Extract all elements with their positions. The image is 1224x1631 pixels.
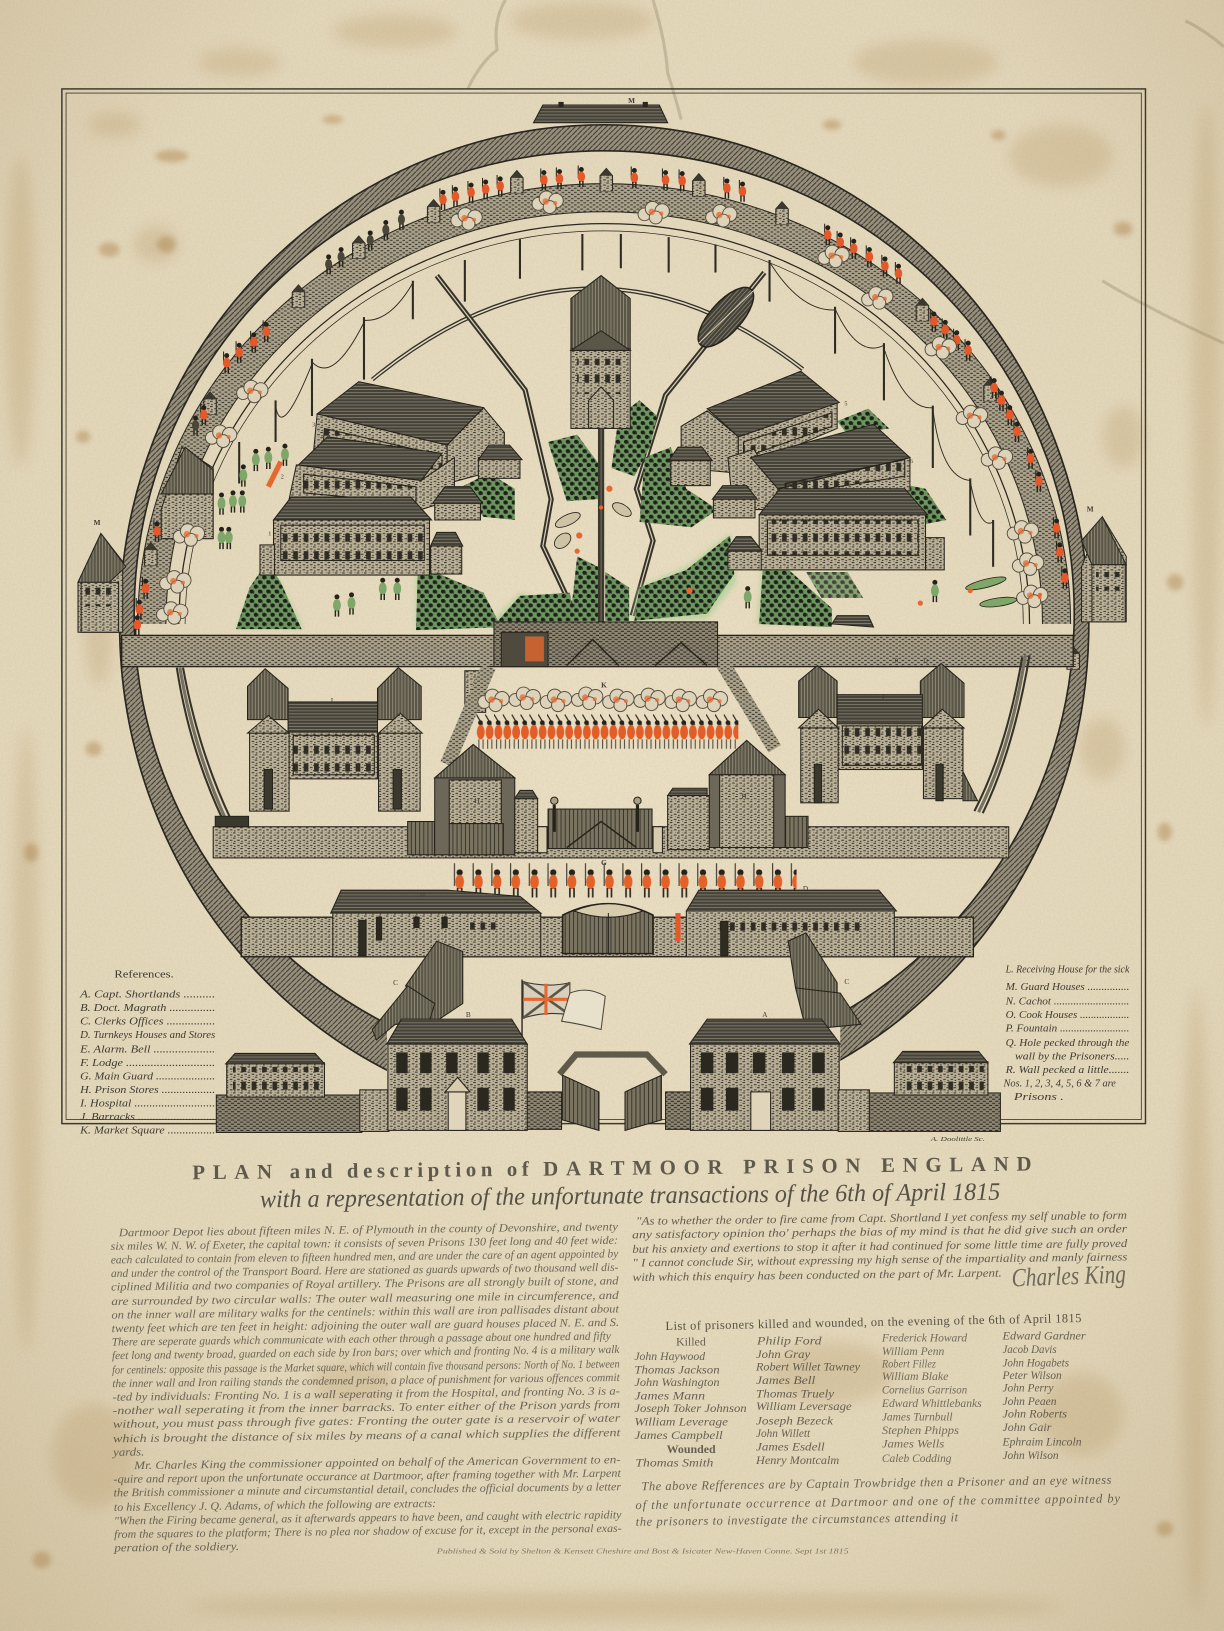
prisoners list column four: John Peaen — [1002, 1394, 1057, 1408]
store H right — [709, 740, 785, 848]
description text left column: -ted by individuals: Fronting No. 1 is a wall seperating it from the Hospital, and fronting No. 3 is a- — [112, 1386, 620, 1404]
double border frame — [62, 89, 1145, 1124]
prisoners list column three: James Turnbull — [882, 1410, 953, 1424]
main title: PLAN and description of DARTMOOR PRISON ENGLAND — [192, 1152, 1035, 1184]
prison 1 — [260, 497, 432, 575]
middle east-west wall with gate: R — [894, 657, 899, 664]
description text left column: are surrounded by two circular walls: The outer wall measuring one mile in circumference, and — [111, 1290, 619, 1308]
small house right — [893, 1051, 988, 1095]
prisoners list column four: Ephraim Lincoln — [1002, 1434, 1082, 1448]
references legend right: N. Cachot ........................... — [1005, 996, 1129, 1008]
description text left column: yards. — [112, 1446, 144, 1459]
prisoners list column four: John Hogabets — [1002, 1355, 1069, 1369]
references legend left: B. Doct. Magrath ............... — [80, 1002, 215, 1014]
description text left column: Mr. Charles King the commissioner appointed on behalf of the American Government to en- — [133, 1454, 621, 1472]
turnkeys houses wall D and outer gate — [241, 885, 973, 957]
closing note on references: the prisoners to investigate the circumstances attending it — [636, 1510, 959, 1529]
description text left column: peration of the soldiery. — [113, 1541, 239, 1555]
main guard soldiers G: G — [601, 859, 607, 867]
description text left column: to his Excellency J. Q. Adams, of which the following are extracts: — [114, 1498, 436, 1514]
references legend right: O. Cook Houses .................. — [1006, 1009, 1129, 1021]
prisons 5 6 7 right: 6 — [910, 458, 913, 465]
description text left column: -quire and report upon the unfortunate occurance at Dartmoor, after framing together with Mr. Larpent — [113, 1468, 622, 1486]
prisoners list column four: John Wilson — [1002, 1448, 1059, 1462]
description text left column: the inner wall and Iron railing stands the condemned prison, a place of punishment for various offences commit — [112, 1372, 621, 1390]
hospital I — [248, 668, 422, 811]
description text right column — [632, 1210, 1128, 1284]
iron palisade posts and chains — [239, 234, 993, 567]
prisons 1 2 3 left: 1 — [268, 531, 271, 538]
description text right column: " I cannot conclude Sir, without expressing my high sense of the impartiality and manly fairness — [632, 1251, 1128, 1269]
outer circular wall — [120, 125, 1089, 1123]
prisoners list column one: James Campbell — [634, 1428, 723, 1442]
prisoners list column three: Caleb Codding — [882, 1451, 952, 1465]
prisoners list column four: John Roberts — [1002, 1406, 1067, 1420]
prisons 1 2 3 left — [260, 382, 522, 575]
clerks offices C left — [372, 941, 463, 1040]
references legend left: K. Market Square ................ — [79, 1125, 215, 1137]
clerks offices C left: C — [393, 979, 398, 987]
radiating yard walls — [437, 272, 764, 619]
description text left column — [109, 1221, 623, 1555]
prisoners list column four — [1001, 1328, 1086, 1462]
prisoners list column one: Thomas Jackson — [634, 1363, 720, 1377]
inner curved side walls and diagonal walls — [177, 655, 1030, 822]
store H left: H — [474, 797, 480, 805]
flag — [522, 980, 605, 1040]
references legend right: wall by the Prisoners..... — [1015, 1051, 1129, 1063]
prisoners list column two: Joseph Bezeck — [756, 1414, 834, 1428]
prisoners list column one: John Washington — [634, 1375, 720, 1389]
prisoners list column three — [881, 1330, 982, 1465]
prisoners list column two: John Willett — [756, 1426, 811, 1440]
description text left column: for centinels: opposite this passage is the Market square, which will contain five thousand persons: North of No. 1 between — [112, 1358, 620, 1377]
signature Charles King: Charles King — [1011, 1259, 1126, 1292]
references legend left: F. Lodge ............................. — [79, 1057, 215, 1069]
cachot oval N — [689, 279, 763, 355]
prisoners list column three: Frederick Howard — [881, 1330, 967, 1344]
prisoners list column two: John Gray — [756, 1347, 811, 1361]
description text left column: which is brought the distance of six miles by means of a canal which supplies the different — [113, 1427, 622, 1445]
references legend left: D. Turnkeys Houses and Stores — [79, 1029, 215, 1041]
publisher imprint: Published & Sold by Shelton & Kensett Cheshire and Bost & Isicater New-Haven Conne. Sept 1st 1815 — [435, 1547, 849, 1556]
house B Doct Magrath: B — [466, 1011, 471, 1019]
main title — [192, 1152, 1035, 1213]
references legend left: I. Hospital ........................... — [79, 1097, 215, 1109]
guard house M right: M — [1087, 506, 1094, 514]
description text left column: twenty feet which are ten feet in height: adjoining the outer wall are guard houses placed N. E. and S. — [112, 1317, 619, 1335]
references legend left — [79, 969, 215, 1137]
references legend right: Prisons . — [1013, 1091, 1064, 1103]
references legend right: M. Guard Houses ............... — [1005, 981, 1129, 993]
main guard soldiers G — [451, 859, 797, 898]
barracks J: J — [882, 693, 885, 701]
clerks offices C right — [788, 933, 861, 1030]
references legend right: Q. Hole pecked through the — [1006, 1037, 1130, 1049]
list of prisoners heading: List of prisoners killed and wounded, on the evening of the 6th of April 1815 — [665, 1311, 1082, 1333]
store H right: H — [741, 793, 747, 801]
description text left column: -nother wall seperating it from the inner barracks. To enter either of the Prison yards from — [113, 1399, 620, 1417]
prisoners list column four: Peter Wilson — [1002, 1368, 1062, 1382]
hospital I: I — [331, 697, 334, 705]
prisoners list column four: Jacob Davis — [1002, 1342, 1057, 1356]
closing note on references — [635, 1473, 1121, 1529]
prison 7 — [759, 489, 944, 570]
prison 2 — [289, 437, 454, 510]
prisoners list column one: Killed — [676, 1335, 706, 1349]
engraver credit: A. Doolittle Sc. — [929, 1136, 985, 1143]
market square K firing soldiers — [476, 681, 738, 754]
prisoners list column two — [755, 1334, 861, 1467]
main title: with a representation of the unfortunate transactions of the 6th of April 1815 — [260, 1179, 1000, 1213]
description text left column: "When the Firing became general, as it afterwards appears to have been, and caught with electric rapidity — [114, 1509, 622, 1527]
description text left column: on the inner wall are military walks for the centinels: within this wall are iron pallisades distant about — [111, 1303, 620, 1322]
description text left column: feet long and twenty broad, guarded on each side by Iron bars; over which and fronting No. 4 is a military walk — [112, 1344, 620, 1362]
prisoners list column four: John Perry — [1002, 1380, 1054, 1394]
prisoners list column two: Robert Willet Tawney — [755, 1360, 861, 1374]
guard house M right — [1082, 506, 1126, 622]
guard house M left: M — [94, 519, 101, 527]
soldiers on the wall firing — [134, 165, 1069, 635]
description text left column: each calculated to contain from eleven to fifteen hundred men, and are under the care of an agent appointed by — [111, 1248, 619, 1266]
house B Doct Magrath — [360, 1011, 527, 1131]
prisoners list column three: Stephen Phipps — [882, 1423, 959, 1437]
prisoners list column two: Philip Ford — [756, 1334, 822, 1348]
references legend right — [1003, 963, 1130, 1103]
description text left column: and under the control of the Transport Board. Here are stationed as guards upwards of two thousand well dis- — [111, 1262, 619, 1280]
market square K firing soldiers: K — [601, 681, 607, 689]
house A Capt Shortlands — [689, 1011, 869, 1131]
musket smoke puffs on wall — [157, 191, 1048, 624]
prisoners list column three: Edward Whittlebanks — [881, 1396, 982, 1410]
references legend left: J. Barracks .......................... — [80, 1111, 215, 1123]
description text right column: "As to whether the order to fire came from Capt. Shortland I yet confess my self unable to form — [636, 1210, 1127, 1228]
middle east-west wall with gate: Q — [923, 657, 928, 664]
lower yard wall with prison stores H and gate — [213, 740, 1009, 858]
references legend left: References. — [114, 969, 174, 981]
references legend left: E. Alarm. Bell .................... — [79, 1043, 215, 1055]
prison 3 — [312, 382, 504, 484]
prisons 1 2 3 left: 2 — [281, 473, 284, 480]
prisons 5 6 7 right — [669, 371, 944, 570]
references legend left: C. Clerks Offices ................ — [80, 1015, 215, 1027]
fountain pole — [598, 428, 604, 622]
prisoners list column four: John Gair — [1002, 1420, 1052, 1434]
turnkeys houses wall D and outer gate: D — [420, 891, 425, 898]
small houses — [669, 447, 762, 570]
guard house M left — [78, 519, 126, 632]
prisoners list column three: Cornelius Garrison — [882, 1382, 967, 1396]
prison 5 — [681, 371, 839, 473]
description text left column: from the squares to the platform; There is no plea nor shadow of excuse for it, except in the personal exas- — [114, 1523, 622, 1541]
prisoners list column three: William Blake — [882, 1369, 949, 1383]
store H left — [435, 745, 515, 855]
prisoners list column one: William Leverage — [634, 1415, 729, 1429]
references legend left: A. Capt. Shortlands .......... — [79, 988, 215, 1000]
inner arc wall — [372, 288, 803, 380]
references legend left: G. Main Guard .................... — [80, 1070, 215, 1082]
turnkeys houses wall D and outer gate: D — [803, 885, 808, 893]
small house left — [226, 1053, 324, 1097]
description text left column: without, you must pass through five gates: Fronting the outer gate is a reservoir of water — [113, 1413, 621, 1431]
prisoners list column three: James Wells — [882, 1437, 945, 1451]
arch gateway — [559, 1054, 666, 1130]
references legend right: R. Wall pecked a little....... — [1005, 1064, 1129, 1076]
description text left column: six miles W. N. W. of Exeter, the capital town: it consists of seven Prisons 130 feet long and 40 feet wide: — [111, 1235, 618, 1253]
prisoners list column two: Thomas Truely — [756, 1387, 835, 1401]
description text left column: There are seperate guards which communicate with each other through a passage about one hundred and fifty — [112, 1330, 612, 1349]
references legend right: Nos. 1, 2, 3, 4, 5, 6 & 7 are — [1003, 1078, 1116, 1090]
closing note on references: The above Refferences are by Captain Trowbridge then a Prisoner and an eye witness — [641, 1473, 1112, 1493]
small houses — [431, 445, 522, 574]
prisoners list column two: James Esdell — [756, 1440, 825, 1454]
prisoners list column two: William Leversage — [756, 1399, 852, 1413]
guard house M top: M — [628, 97, 635, 105]
description text right column: with which this enquiry has been conducted on the part of Mr. Larpent. — [633, 1267, 1002, 1284]
prisons 1 2 3 left: 3 — [312, 421, 315, 428]
prisoners list column one: Joseph Toker Johnson — [634, 1401, 747, 1415]
prisoners list column one: James Mann — [634, 1389, 705, 1403]
prisons 5 6 7 right: 5 — [844, 401, 848, 408]
middle east-west wall with gate — [122, 616, 1073, 712]
references legend left: H. Prison Stores .................. — [79, 1084, 215, 1096]
guard turrets on wall — [145, 168, 1079, 670]
closing note on references: of the unfortunate occurrence at Dartmoor and one of the committee appointed by — [635, 1491, 1121, 1512]
central tower — [571, 276, 630, 428]
prisoners list column two: James Bell — [756, 1373, 816, 1387]
guard house M top — [533, 97, 668, 123]
references legend right: P. Fountain ......................... — [1005, 1023, 1129, 1035]
prisoners list column four: Edward Gardner — [1001, 1328, 1086, 1342]
prisoners list column three: Robert Fillez — [881, 1356, 936, 1370]
prisoners list column one: Thomas Smith — [635, 1455, 713, 1469]
main gate — [538, 797, 662, 853]
description text right column: but his anxiety and exertions to stop it after it had continued for some little time are fully proved — [632, 1238, 1128, 1256]
references legend right: L. Receiving House for the sick — [1005, 963, 1129, 975]
prisoners list column one — [634, 1335, 747, 1469]
description text right column: any satisfactory opinion tho' perhaps the bias of my mind is that he did give such an order — [632, 1223, 1128, 1241]
house A Capt Shortlands: A — [762, 1011, 768, 1019]
prisoners list column one: Wounded — [667, 1442, 716, 1456]
clerks offices C right: C — [844, 978, 849, 986]
prisoner crowds in green — [236, 400, 946, 630]
barracks J — [799, 663, 978, 803]
inner circular wall / military walk — [152, 198, 1057, 624]
prisoners list column three: William Penn — [882, 1344, 944, 1358]
description text left column: the British commissioner a minute and circumstantial detail, concludes the official documents by a letter — [114, 1481, 622, 1499]
prisoners in the yards — [218, 444, 1042, 617]
prisoners list column one: John Haywood — [634, 1349, 705, 1363]
prisoners list column two: Henry Montcalm — [755, 1453, 840, 1467]
description text left column: Dartmoor Depot lies about fifteen miles N. E. of Plymouth in the county of Devonshire, and twenty — [118, 1221, 619, 1239]
description text left column: ciplined Militia and two companies of Royal artillery. The Prisons are all strongly built of stone, and — [111, 1275, 619, 1293]
prison 6 — [728, 424, 910, 510]
front low walls — [216, 1092, 1000, 1132]
